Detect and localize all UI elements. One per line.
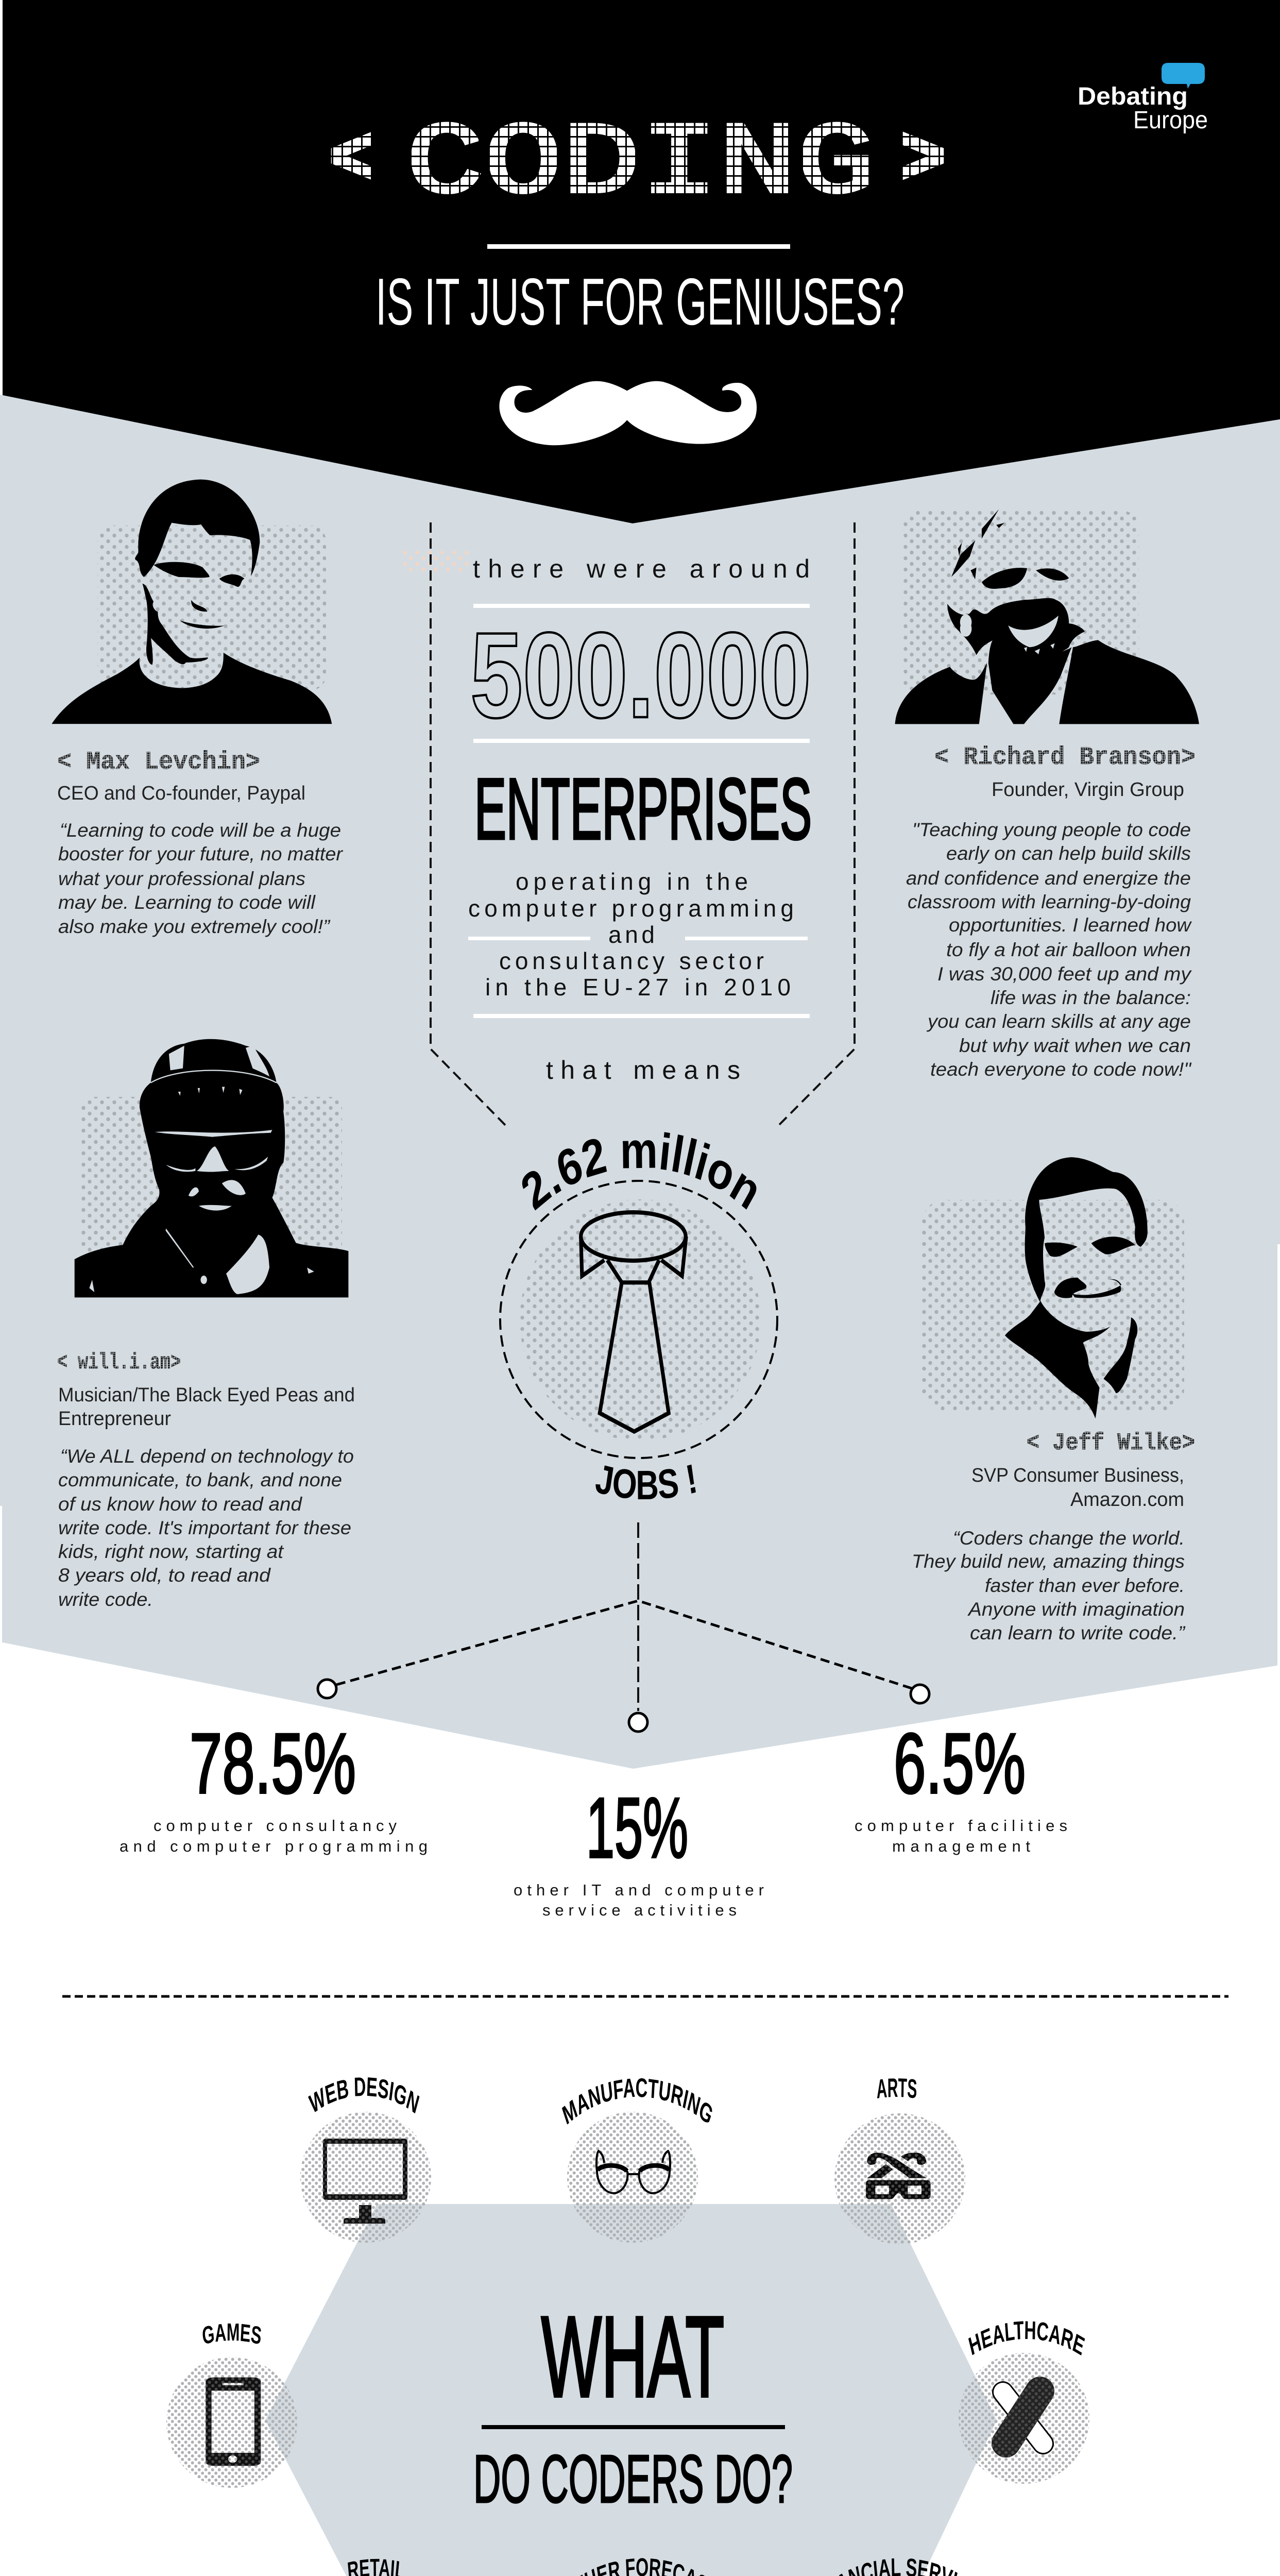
title: CODING: > [901, 117, 945, 205]
quote: Max Levchin: what your professional plans [58, 868, 305, 889]
title: CODING: CODING [406, 107, 875, 223]
quote: will.i.am: “We ALL depend on technology to [60, 1446, 354, 1467]
quote: Richard Branson: but why wait when we can [959, 1035, 1191, 1056]
stat panel: 500.000 enterprises [468, 554, 812, 1084]
text: 2.62 million: 2.62 million [522, 1132, 756, 1211]
connector tree [318, 1522, 929, 1732]
logo: Debating Europe: Europe [1133, 107, 1208, 134]
quote: Richard Branson: life was in the balance: [991, 987, 1191, 1008]
quote: will.i.am: write code. It's important for these [58, 1517, 351, 1538]
stat panel: 500.000 enterprises: ENTERPRISES [474, 760, 812, 857]
item: games: GAMES [203, 2324, 261, 2344]
quote: will.i.am: 8 years old, to read and [58, 1565, 271, 1586]
name: will.i.am: < will.i.am> [57, 1350, 181, 1376]
quote: Richard Branson: "Teaching young people to code [912, 819, 1191, 840]
quote: Max Levchin: booster for your future, no matter [58, 843, 344, 865]
stat panel: 500.000 enterprises: 500.000 [470, 607, 811, 743]
quote: Richard Branson: opportunities. I learned how [949, 914, 1192, 936]
stat: 6.5%: 6.5% [894, 1716, 1026, 1811]
role: Jeff Wilke: Amazon.com [1070, 1489, 1184, 1511]
stat panel: 500.000 enterprises: there were around [473, 554, 810, 583]
item: manufacturing: MANUFACTURING [561, 2078, 712, 2125]
role: will.i.am [58, 1384, 355, 1430]
stat: 78.5%: computer consultancy [153, 1817, 397, 1835]
subtitle: IS IT JUST FOR GENIUSES? [376, 265, 904, 339]
quote: Richard Branson: early on can help build skills [946, 843, 1191, 864]
role: Richard Branson: Founder, Virgin Group [992, 779, 1184, 801]
quote: Richard Branson: to fly a hot air balloon when [946, 939, 1191, 960]
stat: 15% [514, 1781, 764, 1919]
item: arts: ARTS [877, 2078, 917, 2098]
portrait: Richard Branson [895, 509, 1199, 724]
item: games [166, 2324, 297, 2488]
quote: Richard Branson [906, 819, 1192, 1080]
item: healthcare [959, 2321, 1089, 2484]
role: Max Levchin: CEO and Co-founder, Paypal [57, 783, 305, 804]
quote: Jeff Wilke: “Coders change the world. [953, 1528, 1185, 1549]
title: CODING [330, 107, 945, 223]
hexagon panel [265, 2204, 997, 2576]
name: Jeff Wilke: < Jeff Wilke> [1027, 1430, 1195, 1456]
portrait: Jeff Wilke [922, 1157, 1184, 1418]
quote: Richard Branson: you can learn skills at any age [926, 1011, 1191, 1032]
quote: Max Levchin: also make you extremely cool!” [58, 916, 331, 937]
quote: will.i.am: kids, right now, starting at [58, 1541, 284, 1562]
item: web design: WEB DESIGN [308, 2077, 419, 2113]
stat panel: 500.000 enterprises: and [608, 921, 655, 948]
stat panel: 500.000 enterprises: computer programming [468, 895, 794, 922]
heading rule [482, 2425, 785, 2429]
portrait: Max Levchin [52, 480, 332, 724]
stat: 78.5%: 78.5% [190, 1716, 356, 1811]
stat: 6.5%: computer facilities [855, 1817, 1067, 1835]
quote: Richard Branson: and confidence and energize the [906, 868, 1191, 889]
quote: Jeff Wilke: Anyone with imagination [967, 1599, 1185, 1620]
logo: Debating Europe: Debating [1078, 83, 1188, 110]
stat: 78.5%: and computer programming [120, 1837, 428, 1855]
role: Jeff Wilke: SVP Consumer Business, [971, 1465, 1184, 1486]
quote: will.i.am [58, 1446, 354, 1610]
name: Richard Branson: < Richard Branson> [934, 743, 1196, 772]
quote: Max Levchin: “Learning to code will be a huge [60, 820, 341, 841]
stat panel: 500.000 enterprises: in the EU-27 in 2010 [485, 974, 791, 1001]
icon: tie [581, 1212, 686, 1432]
heading: do coders do: DO CODERS DO? [473, 2441, 793, 2517]
stat: 15%: service activities [542, 1901, 737, 1919]
quote: will.i.am: of us know how to read and [58, 1494, 302, 1515]
quote: Richard Branson: classroom with learning-by-doing [908, 891, 1191, 912]
quote: Jeff Wilke: They build new, amazing things [912, 1551, 1185, 1572]
stat: 6.5% [855, 1716, 1067, 1855]
quote: Richard Branson: I was 30,000 feet up and my [937, 963, 1192, 985]
quote: Jeff Wilke: can learn to write code.” [970, 1622, 1186, 1643]
role: will.i.am: Musician/The Black Eyed Peas and [58, 1384, 355, 1406]
quote: Max Levchin [58, 820, 344, 937]
name: Max Levchin: < Max Levchin> [57, 748, 260, 776]
stat panel: 500.000 enterprises: operating in the [516, 868, 748, 895]
quote: will.i.am: communicate, to bank, and none [58, 1469, 342, 1490]
heading: WHAT: WHAT [541, 2293, 724, 2421]
jobs badge [499, 1132, 778, 1499]
item: healthcare: HEALTHCARE [968, 2321, 1085, 2355]
stat panel: 500.000 enterprises: consultancy sector [499, 947, 764, 974]
title rule [487, 244, 790, 249]
dashed bracket [431, 522, 855, 1128]
portrait: will.i.am [75, 1039, 348, 1297]
icon: moustache [499, 381, 757, 445]
stat: 78.5% [120, 1716, 428, 1855]
item: web design [300, 2077, 431, 2243]
stat: 15%: 15% [586, 1781, 688, 1876]
logo: Debating Europe [1078, 63, 1208, 134]
quote: will.i.am: write code. [58, 1589, 153, 1610]
quote: Jeff Wilke [912, 1528, 1186, 1643]
peach halftone fragment [403, 550, 468, 573]
title: CODING: < [330, 117, 373, 205]
item: manufacturing [561, 2078, 712, 2243]
item: arts [834, 2078, 965, 2244]
text: JOBS !: JOBS ! [595, 1464, 696, 1499]
quote: Jeff Wilke: faster than ever before. [985, 1575, 1185, 1596]
role: Jeff Wilke [971, 1465, 1184, 1511]
grey main panel [0, 395, 1280, 1769]
stat: 6.5%: management [892, 1837, 1030, 1855]
quote: Richard Branson: teach everyone to code now!" [930, 1059, 1192, 1080]
quote: Max Levchin: may be. Learning to code will [58, 892, 316, 913]
role: will.i.am: Entrepreneur [58, 1408, 171, 1430]
stat panel: 500.000 enterprises: that means [546, 1056, 740, 1084]
header black banner [3, 0, 1280, 523]
stat: 15%: other IT and computer [514, 1881, 764, 1899]
